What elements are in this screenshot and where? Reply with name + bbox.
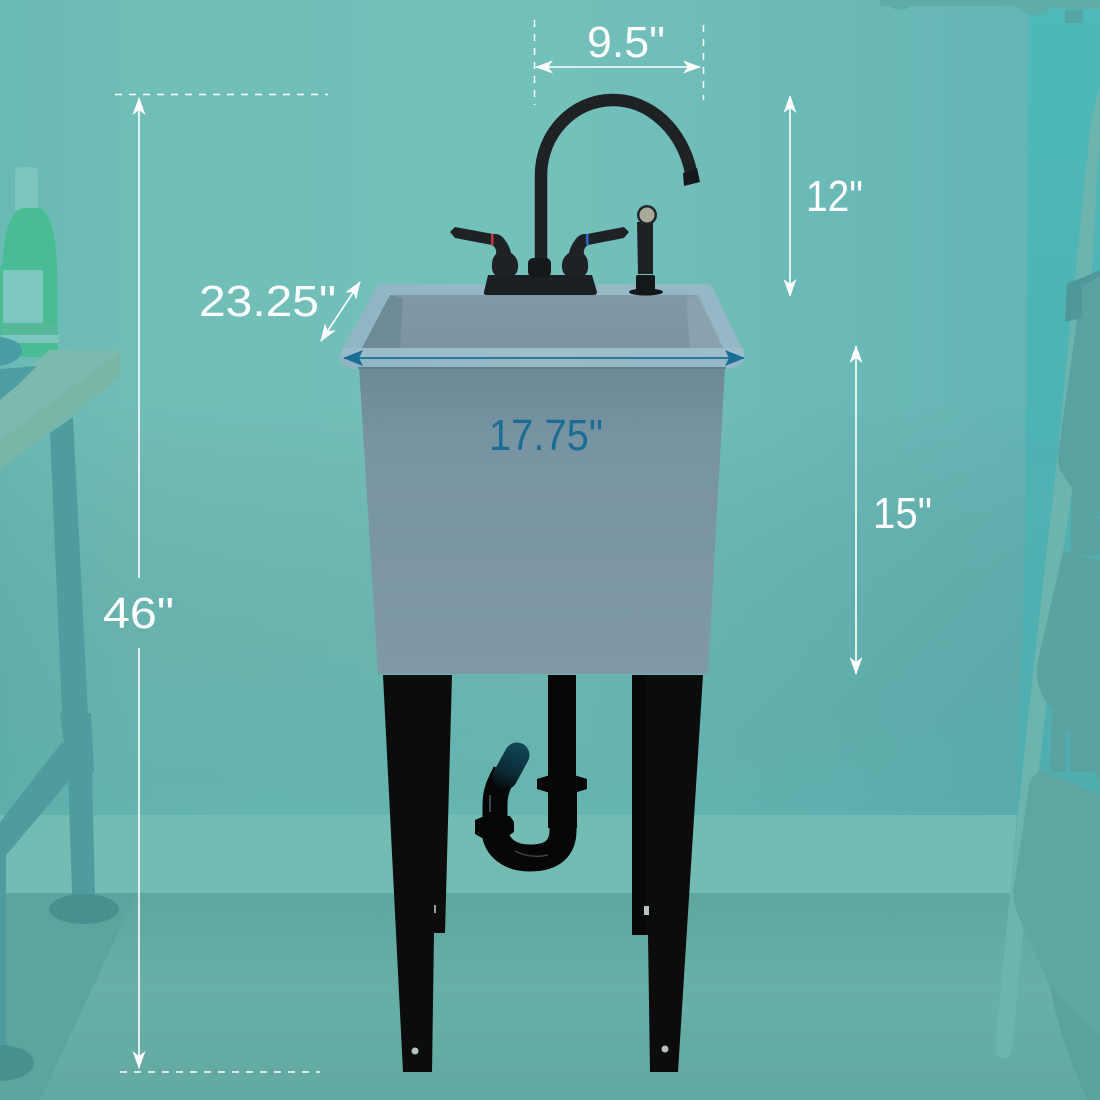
tub body	[359, 366, 725, 674]
arrow: 46 inch total height lower	[138, 648, 140, 1068]
deck plate	[484, 275, 597, 295]
arrow: 12 inch faucet height	[789, 96, 791, 296]
guide: spout reach left dashed line	[534, 20, 536, 105]
label: 23.25 inch: 23.25"	[199, 277, 336, 326]
left leg	[383, 675, 452, 1072]
guide: spout reach right dashed line	[702, 25, 704, 100]
arrow: 46 inch total height upper	[138, 98, 140, 578]
label: 15 inch: 15"	[873, 489, 932, 538]
arrow: 9.5 inch spout reach	[536, 66, 700, 68]
sink legs	[383, 675, 703, 1072]
gooseneck spout	[541, 100, 691, 262]
tub rim	[339, 284, 744, 369]
left handle	[450, 227, 518, 276]
center nut	[528, 258, 551, 277]
background: baseboard	[0, 815, 1017, 893]
tub basin	[362, 295, 723, 348]
guide: bottom dashed line	[120, 1071, 320, 1073]
P-trap drain pipe	[475, 675, 587, 858]
arrow: 17.75 inch width	[344, 357, 744, 359]
label: 17.75 inch: 17.75"	[489, 411, 603, 460]
side sprayer	[629, 205, 663, 296]
sink tub	[339, 284, 744, 674]
arrow: 23.25 inch depth	[321, 282, 360, 341]
background: floor	[0, 893, 1100, 1100]
guide: top dashed line	[115, 94, 328, 96]
background: pipe shelf legs	[0, 417, 119, 1081]
background: shelf with bottle and towels	[0, 167, 120, 470]
arrow: 15 inch basin depth	[855, 346, 857, 674]
right leg	[632, 675, 703, 1072]
right handle	[562, 227, 629, 276]
background: overhead pipe	[880, 0, 1100, 23]
faucet	[450, 100, 700, 296]
label: 12 inch: 12"	[806, 172, 863, 221]
background: step ladder	[995, 88, 1100, 1100]
label: 46 inch: 46"	[103, 589, 174, 638]
label: 9.5 inch: 9.5"	[587, 18, 665, 67]
